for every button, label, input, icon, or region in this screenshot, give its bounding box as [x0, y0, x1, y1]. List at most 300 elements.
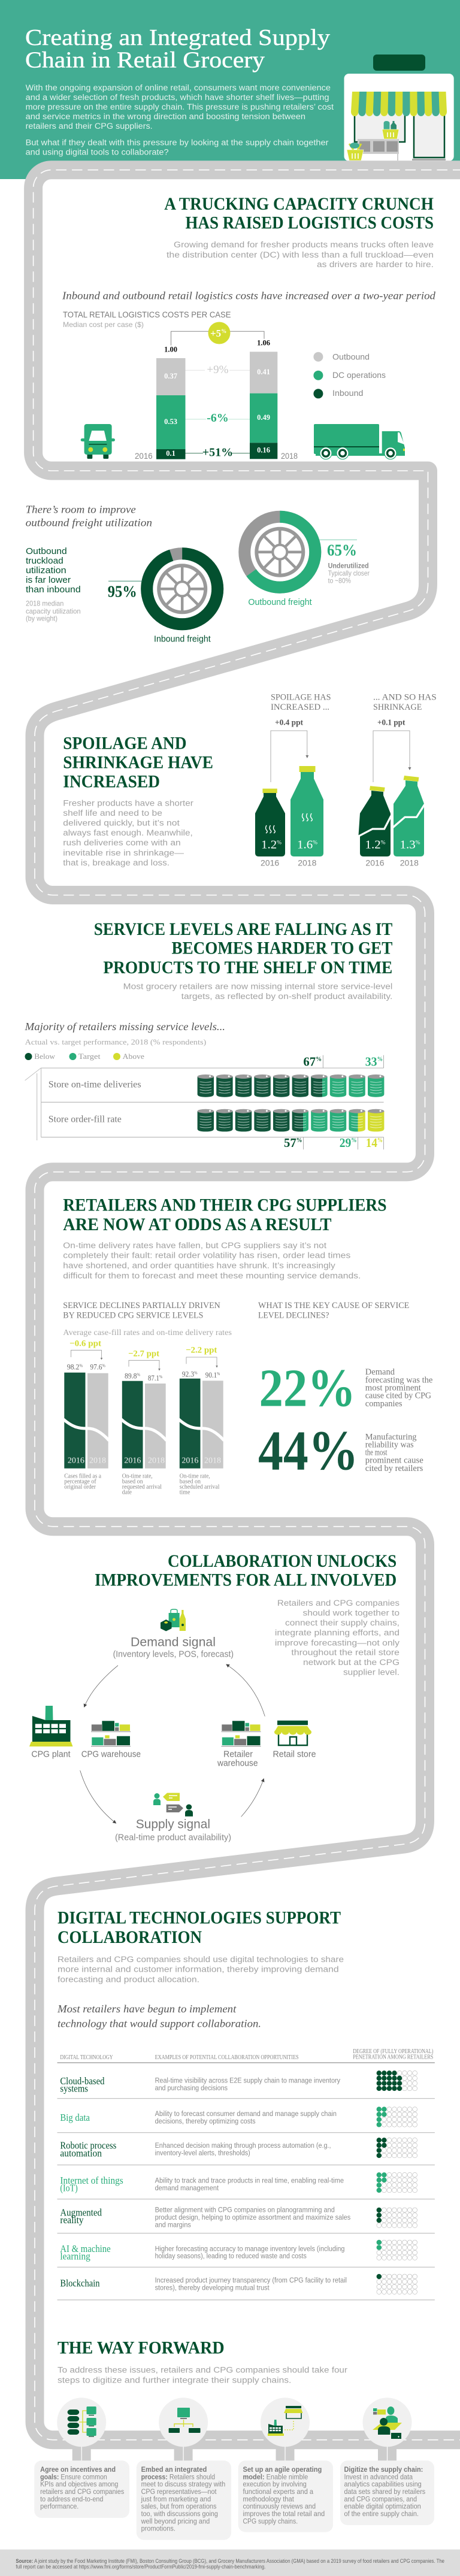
- card: digitize the supply chain: Invest in advanced data: [344, 2472, 413, 2481]
- heading: digital technologies: DIGITAL TECHNOLOGIES SUPPORT: [58, 1908, 341, 1928]
- bar chart: service declines, cases filled: 98.2: [67, 1363, 80, 1372]
- heading: retailers and suppliers: ARE NOW AT ODDS AS A RESULT: [63, 1215, 332, 1234]
- table: store service performance: %: [296, 1137, 302, 1144]
- donut chart: outbound freight: to ~80%: [328, 577, 351, 585]
- bottle chart: spoilage: INCREASED ...: [271, 703, 329, 712]
- heading: collaboration: [95, 1551, 397, 1590]
- bottle chart: spoilage: 1.6: [297, 839, 312, 852]
- table row: AI and machine learning: holiday seasons), leading to reduced waste and costs: [155, 2252, 307, 2260]
- text block: service levels: targets, as reflected by on-shelf product availability.: [181, 992, 392, 1001]
- card: embed an integrated process: too, with discussions going: [141, 2510, 218, 2518]
- bar chart: service declines, on-time requested arrival: [121, 1349, 167, 1496]
- stacked bar chart: retail logistics costs: 2016: [135, 451, 153, 461]
- table row: cloud-based systems: Cloud-based: [60, 2075, 105, 2087]
- heading: spoilage and shrinkage: [63, 734, 213, 791]
- table row: robotic process automation: inventory-level alerts, thresholds): [155, 2148, 250, 2157]
- bar chart: service declines, on-time requested arrival: %: [159, 1375, 162, 1379]
- table row: internet of things: Ability to track and trace products in real time, enabling real-time: [155, 2177, 344, 2185]
- bottle chart: shrinkage: 2016: [365, 858, 385, 868]
- text block: the way forward: [58, 2366, 348, 2384]
- intro text block: With the ongoing expansion of online retail, consumers want more convenience: [26, 83, 331, 92]
- table header: digital technologies: DEGREE OF (FULLY OPERATIONAL): [353, 2048, 434, 2055]
- table row: internet of things: [58, 2172, 435, 2199]
- table row: internet of things: demand management: [155, 2184, 219, 2192]
- chart heading: service declines: [63, 1301, 232, 1337]
- bar chart: service declines, on-time scheduled arrival: 90.1: [205, 1371, 219, 1379]
- text block: spoilage: rush deliveries come with an: [63, 839, 181, 847]
- subheading: outbound freight utilization: There’s room to improve: [26, 504, 136, 516]
- bar chart: service declines, on-time scheduled arrival: [178, 1346, 224, 1496]
- heading: digital technologies: [58, 1908, 341, 1947]
- arrow: retailer to demand signal: [226, 1664, 265, 1717]
- stacked bar chart: retail logistics costs: 0.53: [164, 417, 177, 426]
- table row: cloud-based systems: Real-time visibility across E2E supply chain to manage inventory: [155, 2076, 341, 2085]
- donut chart: outbound freight: Outbound freight: [248, 598, 312, 607]
- donut chart: inbound freight: [108, 553, 217, 644]
- text block: spoilage: that is, breakage and loss.: [63, 858, 170, 867]
- card: digitize the supply chain: data sets shared by retailers: [344, 2487, 425, 2496]
- bar chart: service declines, on-time scheduled arrival: based on: [180, 1479, 201, 1485]
- card: set up an agile operating model: Set up an agile operating: [243, 2465, 322, 2474]
- heading: spoilage and shrinkage: SPOILAGE AND: [63, 734, 187, 753]
- bar chart: service declines, on-time requested arrival: requested arrival: [122, 1484, 162, 1491]
- table row: augmented reality: Augmented: [60, 2206, 102, 2218]
- table row: cloud-based systems: and purchasing decisions: [155, 2084, 228, 2092]
- bar chart: service declines, on-time scheduled arrival: On-time rate,: [180, 1473, 210, 1480]
- card: set up an agile operating model: continuously reviews and: [243, 2502, 316, 2511]
- bottle chart: shrinkage: ... AND SO HAS: [373, 692, 437, 702]
- arrow: warehouse to supply signal: [80, 1770, 116, 1823]
- card: set up an agile operating model: CPG supply chains.: [243, 2517, 298, 2525]
- stat: 22% demand forecasting: 22%: [259, 1358, 356, 1418]
- donut chart: outbound freight: Typically closer: [328, 569, 370, 577]
- stacked bar chart: retail logistics costs: 0.37: [164, 372, 177, 380]
- table: store service performance: [25, 1054, 384, 1150]
- text block: truckload utilization: is far lower: [26, 575, 71, 585]
- card: set up an agile operating model: functional experts and a: [243, 2487, 313, 2496]
- card: agree on incentives and goals: Agree on incentives and: [40, 2465, 116, 2474]
- road stems to step cards: [72, 2447, 397, 2462]
- intro text block: and a wider selection of fresh products, which have shorter shelf lives—putting: [26, 93, 329, 102]
- chart heading: key cause: LEVEL DECLINES?: [258, 1311, 329, 1321]
- subheading: outbound freight utilization: [26, 504, 152, 528]
- legend: logistics costs: Inbound: [332, 388, 363, 398]
- bottle chart: spoilage: +0.4 ppt: [275, 718, 303, 727]
- heading: spoilage and shrinkage: SHRINKAGE HAVE: [63, 753, 213, 773]
- bottle chart: spoilage: 2016: [261, 858, 279, 868]
- diagram: demand signal: Demand signal: [131, 1635, 216, 1649]
- bottle chart: shrinkage: 2018: [400, 858, 419, 868]
- card: embed an integrated process: process: Retailers should: [141, 2472, 215, 2481]
- table row: robotic process automation: automation: [60, 2148, 102, 2159]
- arrow: demand signal to CPG plant: [84, 1666, 118, 1707]
- stacked bar chart: retail logistics costs: 1.06: [257, 339, 270, 347]
- table row: internet of things: (IoT): [60, 2183, 78, 2194]
- donut chart: inbound freight: 95%: [108, 583, 137, 601]
- subheading: implement technology: technology that would support collaboration.: [58, 2017, 261, 2029]
- bar chart: service declines, on-time requested arrival: 2018: [148, 1457, 165, 1466]
- intro text block: more pressure on the entire supply chain. This pressure is pushing retailers’ cost: [26, 102, 334, 111]
- card: set up an agile operating model: methodology that: [243, 2495, 294, 2503]
- table row: big data: decisions, thereby optimizing costs: [155, 2117, 256, 2125]
- table header: digital technologies: [58, 2048, 435, 2063]
- text block: collaboration: throughout the retail store: [291, 1648, 400, 1657]
- heading: service levels: [94, 919, 392, 977]
- card: embed an integrated process: Embed an integrated: [141, 2465, 207, 2474]
- stat: 44% manufacturing reliability: cited by retailers: [365, 1464, 423, 1473]
- card: embed an integrated process: [137, 2460, 231, 2540]
- stacked bar chart: retail logistics costs: 0.16: [257, 446, 270, 455]
- chart subtitle: logistics costs: Inbound and outbound retail logistics costs have increased over a two-year period: [62, 289, 435, 301]
- icon: retail store: [273, 1721, 316, 1759]
- heading: trucking capacity crunch: [164, 194, 434, 233]
- table row: robotic process automation: Robotic process: [60, 2140, 116, 2151]
- table: store service performance: %: [351, 1137, 357, 1144]
- text block: retailers and suppliers: [63, 1241, 361, 1280]
- intro text block: retailers and their CPG suppliers.: [26, 122, 153, 131]
- text block: the way forward: To address these issues, retailers and CPG companies should take four: [58, 2366, 348, 2375]
- text block: truckload utilization: 2018 median: [26, 600, 63, 608]
- table row: blockchain: Blockchain: [60, 2278, 99, 2289]
- footer: source: full report can be accessed at https://www.fmi.org/forms/store/ProductFormPublic/2019-fmi-supply-chain-benchmarking.: [16, 2564, 265, 2571]
- legend: service performance: Below: [34, 1052, 56, 1061]
- chart title: TOTAL RETAIL LOGISTICS COSTS PER CASE: [63, 310, 231, 319]
- icon: truck front: [81, 424, 115, 459]
- text block: collaboration: [275, 1599, 400, 1677]
- card: embed an integrated process: promotions.: [141, 2524, 175, 2533]
- text block: collaboration: connect their supply chains,: [285, 1618, 400, 1627]
- text block: spoilage: delivered quickly, but it’s not: [63, 819, 180, 828]
- stat: 22% demand forecasting: [259, 1358, 433, 1418]
- bottle chart: shrinkage: %: [381, 840, 386, 846]
- chart heading: service declines: Average case-fill rates and on-time delivery rates: [63, 1328, 232, 1337]
- table: store service performance: 67: [303, 1054, 316, 1068]
- table row: AI and machine learning: [58, 2240, 435, 2267]
- chart heading: service declines: SERVICE DECLINES PARTIALLY DRIVEN: [63, 1301, 220, 1310]
- donut chart: inbound freight: Inbound freight: [154, 635, 211, 644]
- icon: agile operating model: [261, 2398, 310, 2447]
- heading: retailers and suppliers: [63, 1195, 387, 1234]
- bar chart: service declines, cases filled: Cases filled as a: [64, 1473, 101, 1480]
- text block: retailers and suppliers: On-time delivery rates have fallen, but CPG suppliers say it’s not: [63, 1241, 326, 1250]
- diagram: supply signal: [115, 1793, 231, 1842]
- text block: collaboration: supplier level.: [343, 1668, 400, 1677]
- text block: trucking: the distribution center (DC) with less than a full truckload—even: [167, 250, 434, 259]
- stat: 22% demand forecasting: forecasting was the: [365, 1375, 433, 1385]
- bar chart: service declines, on-time requested arrival: −2.7 ppt: [128, 1349, 159, 1359]
- bar chart: service declines, on-time requested arrival: date: [122, 1490, 132, 1496]
- bar chart: service declines, cases filled: 2018: [89, 1457, 106, 1466]
- stacked bar chart: retail logistics costs: +9%: [207, 364, 229, 376]
- donut chart: outbound freight: Underutilized: [328, 561, 369, 570]
- text block: spoilage: always fast enough. Meanwhile,: [63, 828, 193, 837]
- bar chart: service declines, on-time scheduled arrival: 2018: [204, 1457, 221, 1466]
- bar chart: service declines, on-time requested arrival: 89.8: [125, 1372, 138, 1381]
- table: store service performance: Store on-time deliveries: [49, 1079, 141, 1089]
- title: [25, 25, 330, 73]
- legend: logistics costs: Outbound: [332, 352, 370, 362]
- subheading: implement technology: [57, 2003, 261, 2029]
- text block: digital technologies: forecasting and product allocation.: [58, 1975, 199, 1984]
- intro text block: and using digital tools to collaborate?: [26, 148, 169, 157]
- diagram: supply signal: (Real-time product availability): [115, 1833, 231, 1842]
- heading: digital technologies: COLLABORATION: [58, 1927, 202, 1947]
- legend: logistics costs: DC operations: [332, 370, 386, 380]
- text block: digital technologies: Retailers and CPG companies should use digital technologies to share: [58, 1955, 344, 1964]
- text block: retailers and suppliers: difficult for them to forecast and meet these mounting service demands.: [63, 1271, 361, 1280]
- heading: service levels: PRODUCTS TO THE SHELF ON TIME: [103, 958, 392, 977]
- bar chart: service declines, on-time requested arrival: %: [137, 1373, 140, 1378]
- table: store service performance: 57: [284, 1136, 296, 1150]
- bottle chart: spoilage: 1.2: [261, 839, 276, 852]
- subheading: missing service levels: Majority of retailers missing service levels...: [25, 1021, 225, 1033]
- table: store service performance: Store order-fill rate: [49, 1114, 122, 1124]
- text block: collaboration: integrate planning efforts, and: [275, 1628, 400, 1637]
- text block: truckload utilization: (by weight): [26, 615, 58, 623]
- text block: truckload utilization: Outbound: [26, 546, 67, 556]
- bar chart: service declines, on-time requested arrival: 87.1: [148, 1374, 161, 1382]
- card: set up an agile operating model: execution by involving: [243, 2480, 307, 2489]
- text block: service levels: Most grocery retailers are now missing internal store service-level: [123, 982, 392, 991]
- diagram: demand signal: [113, 1609, 234, 1660]
- card: agree on incentives and goals: to address end-to-end: [40, 2495, 104, 2503]
- callout: +5%: +5: [210, 328, 221, 339]
- table row: big data: Big data: [60, 2112, 90, 2123]
- card: digitize the supply chain: and CPG companies, and: [344, 2495, 417, 2503]
- table row: big data: Ability to forecast consumer demand and manage supply chain: [155, 2109, 337, 2118]
- text block: digital technologies: [58, 1955, 344, 1984]
- table: store service performance: %: [377, 1056, 383, 1063]
- chart title: Median cost per case ($): [63, 320, 144, 329]
- stat: 44% manufacturing reliability: [258, 1419, 423, 1482]
- text block: trucking: as drivers are harder to hire.: [317, 260, 434, 269]
- text block: collaboration: Retailers and CPG companies: [277, 1599, 400, 1608]
- bar chart: service declines, on-time scheduled arrival: −2.2 ppt: [186, 1346, 217, 1355]
- chart heading: key cause: WHAT IS THE KEY CAUSE OF SERVICE: [258, 1301, 409, 1310]
- card: embed an integrated process: well beyond pricing and: [141, 2517, 210, 2525]
- stacked bar chart: retail logistics costs: 0.41: [257, 368, 270, 376]
- icon: digitize the supply chain: [363, 2398, 412, 2447]
- text block: retailers and suppliers: have shortened, and order quantities have shrunk. It’s increasingly: [63, 1261, 335, 1270]
- table row: blockchain: Increased product journey transparency (from CPG facility to retail: [155, 2276, 347, 2284]
- bar chart: service declines, on-time scheduled arrival: scheduled arrival: [180, 1484, 219, 1491]
- table row: blockchain: [58, 2274, 435, 2300]
- table row: AI and machine learning: learning: [60, 2251, 90, 2262]
- text block: collaboration: should work together to: [303, 1608, 400, 1617]
- bar chart: service declines, cases filled: 97.6: [90, 1363, 103, 1372]
- card: agree on incentives and goals: KPIs and objectives among: [40, 2480, 119, 2489]
- stat: 44% manufacturing reliability: reliability was: [365, 1440, 414, 1450]
- table row: big data: [58, 2107, 435, 2133]
- title: Creating an Integrated Supply: [25, 25, 330, 50]
- bar chart: service declines, on-time requested arrival: based on: [122, 1479, 143, 1485]
- text block: spoilage: shelf life and need to be: [63, 809, 162, 818]
- text block: digital technologies: more internal and customer information, thereby improving demand: [58, 1965, 339, 1974]
- stacked bar chart: retail logistics costs: 0.49: [257, 413, 270, 422]
- text block: trucking: [167, 240, 434, 269]
- subheading: implement technology: Most retailers have begun to implement: [57, 2003, 237, 2015]
- table row: AI and machine learning: Higher forecasting accuracy to manage inventory levels (including: [155, 2244, 345, 2253]
- bottle chart: spoilage: %: [313, 840, 318, 846]
- table row: blockchain: stores), thereby developing mutual trust: [155, 2283, 270, 2292]
- callout: +5%: [208, 322, 230, 344]
- legend: logistics costs: [313, 352, 386, 398]
- card: digitize the supply chain: analytics capabilities using: [344, 2480, 422, 2489]
- text block: retailers and suppliers: completely their fault: retail order volatility has risen, order lead times: [63, 1251, 351, 1260]
- stacked bar chart: retail logistics costs: [135, 331, 298, 461]
- card: embed an integrated process: meet to discuss strategy with: [141, 2480, 225, 2489]
- table row: augmented reality: Better alignment with CPG companies on planogramming and: [155, 2206, 335, 2214]
- bar chart: service declines, on-time scheduled arrival: 2016: [181, 1457, 198, 1466]
- text block: truckload utilization: capacity utilization: [26, 607, 81, 615]
- bar chart: service declines, cases filled: %: [79, 1364, 83, 1369]
- bar chart: service declines, on-time scheduled arrival: time: [180, 1490, 190, 1496]
- icon: integrated process: [159, 2398, 208, 2447]
- table: store service performance: 33: [365, 1054, 378, 1068]
- bar chart: service declines, cases filled: 2016: [68, 1457, 84, 1466]
- heading: spoilage and shrinkage: INCREASED: [63, 771, 160, 791]
- bottle chart: spoilage: 2018: [298, 858, 317, 868]
- table row: cloud-based systems: systems: [60, 2082, 88, 2094]
- stat: 22% demand forecasting: companies: [365, 1399, 402, 1409]
- text block: truckload utilization: truckload: [26, 556, 63, 566]
- text block: truckload utilization: [26, 546, 81, 623]
- table row: augmented reality: [58, 2206, 435, 2233]
- bar chart: service declines, cases filled: %: [102, 1364, 105, 1369]
- icon: incentives and goals: [57, 2398, 106, 2447]
- bar chart: service declines, on-time scheduled arrival: %: [217, 1372, 220, 1376]
- legend: service performance: Target: [78, 1052, 101, 1061]
- bottle chart: shrinkage: 1.3: [400, 839, 414, 852]
- bar chart: service declines, on-time requested arrival: 2016: [124, 1457, 141, 1466]
- stat: 22% demand forecasting: Demand: [365, 1367, 395, 1377]
- text block: trucking: Growing demand for fresher products means trucks often leave: [174, 240, 434, 249]
- table row: robotic process automation: Enhanced decision making through process automation (e.g.,: [155, 2141, 331, 2150]
- icon: CPG warehouse: CPG warehouse: [81, 1749, 141, 1759]
- panel: green header background: [0, 0, 460, 179]
- table: store service performance: 14: [366, 1136, 379, 1150]
- card: agree on incentives and goals: performance.: [40, 2502, 78, 2511]
- chart heading: service declines: BY REDUCED CPG SERVICE LEVELS: [63, 1311, 203, 1321]
- chart heading: key cause: [258, 1301, 409, 1321]
- table: store service performance: %: [377, 1137, 383, 1144]
- bottle chart: spoilage: [255, 692, 331, 868]
- table row: internet of things: Internet of things: [60, 2175, 123, 2186]
- card: embed an integrated process: sales, but from operations: [141, 2502, 217, 2511]
- legend: service performance: Above: [123, 1052, 144, 1061]
- table row: cloud-based systems: [58, 2071, 435, 2099]
- table row: augmented reality: and margins: [155, 2220, 191, 2229]
- bottle chart: shrinkage: SHRINKAGE: [373, 703, 422, 712]
- table row: augmented reality: product design, helping to optimize assortment and maximize sales: [155, 2213, 350, 2221]
- diagram: demand signal: (Inventory levels, POS, forecast): [113, 1650, 234, 1660]
- intro text block: and service metrics in the wrong direction and boosting tension between: [26, 112, 305, 121]
- card: agree on incentives and goals: retailers and CPG companies: [40, 2487, 124, 2496]
- bottle chart: spoilage: %: [277, 840, 282, 846]
- icon: retailer warehouse: [217, 1721, 261, 1768]
- text block: spoilage: Fresher products have a shorter: [63, 799, 193, 808]
- heading: retailers and suppliers: RETAILERS AND THEIR CPG SUPPLIERS: [63, 1195, 387, 1215]
- stacked bar chart: retail logistics costs: -6%: [207, 411, 229, 425]
- icon: retail store: Retail store: [273, 1749, 316, 1759]
- card: set up an agile operating model: [238, 2460, 333, 2532]
- title: Chain in Retail Grocery: [25, 48, 265, 73]
- bottle chart: shrinkage: +0.1 ppt: [377, 718, 405, 727]
- card: agree on incentives and goals: goals: Ensure common: [40, 2472, 107, 2481]
- icon: retailer warehouse: Retailer: [223, 1749, 253, 1759]
- stat: 22% demand forecasting: most prominent: [365, 1383, 422, 1393]
- text block: spoilage: [63, 799, 193, 867]
- icon: CPG plant: [29, 1706, 73, 1759]
- table row: robotic process automation: [58, 2138, 435, 2165]
- chart title: [63, 310, 231, 329]
- icon: truck side: [314, 424, 405, 459]
- donut chart: outbound freight: [244, 517, 370, 607]
- bar chart: service declines, on-time scheduled arrival: %: [194, 1370, 198, 1375]
- table: store service performance: %: [316, 1056, 322, 1063]
- card: embed an integrated process: just from marketing and: [141, 2495, 211, 2503]
- subheading: missing service levels: Actual vs. target performance, 2018 (% respondents): [25, 1037, 206, 1046]
- heading: collaboration: COLLABORATION UNLOCKS: [168, 1551, 397, 1571]
- stat: 44% manufacturing reliability: the most: [365, 1448, 388, 1457]
- bar chart: service declines, cases filled: percentage of: [64, 1479, 96, 1485]
- bottle chart: shrinkage: 1.2: [365, 839, 380, 852]
- table row: AI and machine learning: AI & machine: [60, 2243, 111, 2254]
- stacked bar chart: retail logistics costs: 0.1: [166, 449, 175, 458]
- intro text block: But what if they dealt with this pressure by looking at the supply chain together: [26, 138, 329, 147]
- icon: grocery store: [344, 55, 454, 161]
- text block: service levels: [123, 982, 392, 1001]
- icon: CPG plant: CPG plant: [31, 1749, 71, 1759]
- icon: CPG warehouse: [81, 1721, 141, 1759]
- card: digitize the supply chain: of the entire supply chain.: [344, 2510, 419, 2518]
- card: digitize the supply chain: [340, 2460, 434, 2525]
- table header: digital technologies: EXAMPLES OF POTENTIAL COLLABORATION OPPORTUNITIES: [155, 2054, 299, 2061]
- card: digitize the supply chain: Digitize the supply chain:: [344, 2465, 423, 2474]
- heading: collaboration: IMPROVEMENTS FOR ALL INVOLVED: [95, 1570, 397, 1590]
- bottle chart: shrinkage: [358, 692, 437, 868]
- card: embed an integrated process: CPG representatives—not: [141, 2487, 217, 2496]
- table: store service performance: 29: [340, 1136, 352, 1150]
- card: set up an agile operating model: improves the total retail and: [243, 2510, 325, 2518]
- text block: truckload utilization: than inbound: [26, 585, 81, 595]
- bar chart: service declines, cases filled: −0.6 ppt: [69, 1339, 101, 1348]
- heading: trucking capacity crunch: HAS RAISED LOGISTICS COSTS: [186, 213, 434, 233]
- icon: retailer warehouse: warehouse: [217, 1758, 258, 1768]
- legend: service performance: [25, 1052, 144, 1061]
- bar chart: service declines, cases filled: [63, 1339, 109, 1491]
- stat: 44% manufacturing reliability: Manufacturing: [365, 1432, 417, 1442]
- bottle chart: spoilage: SPOILAGE HAS: [271, 692, 331, 702]
- text block: collaboration: network but at the CPG: [303, 1658, 400, 1667]
- card: agree on incentives and goals: [34, 2460, 129, 2518]
- stat: 22% demand forecasting: cause cited by CPG: [365, 1391, 431, 1401]
- bottle chart: shrinkage: %: [416, 840, 420, 846]
- intro text block: [26, 83, 334, 157]
- stacked bar chart: retail logistics costs: +51%: [202, 446, 233, 459]
- heading: trucking capacity crunch: A TRUCKING CAPACITY CRUNCH: [164, 194, 434, 214]
- table row: augmented reality: reality: [60, 2214, 84, 2226]
- text block: collaboration: improve forecasting—not only: [275, 1638, 400, 1647]
- heading: the way forward: THE WAY FORWARD: [58, 2338, 225, 2357]
- heading: service levels: SERVICE LEVELS ARE FALLING AS IT: [94, 919, 392, 939]
- table header: digital technologies: DIGITAL TECHNOLOGY: [60, 2054, 113, 2061]
- heading: service levels: BECOMES HARDER TO GET: [171, 939, 392, 958]
- stat: 44% manufacturing reliability: prominent cause: [365, 1456, 423, 1466]
- donut chart: outbound freight: 65%: [327, 541, 357, 559]
- stat: 44% manufacturing reliability: 44%: [258, 1419, 358, 1482]
- text block: spoilage: inevitable rise in shrinkage—: [63, 848, 184, 857]
